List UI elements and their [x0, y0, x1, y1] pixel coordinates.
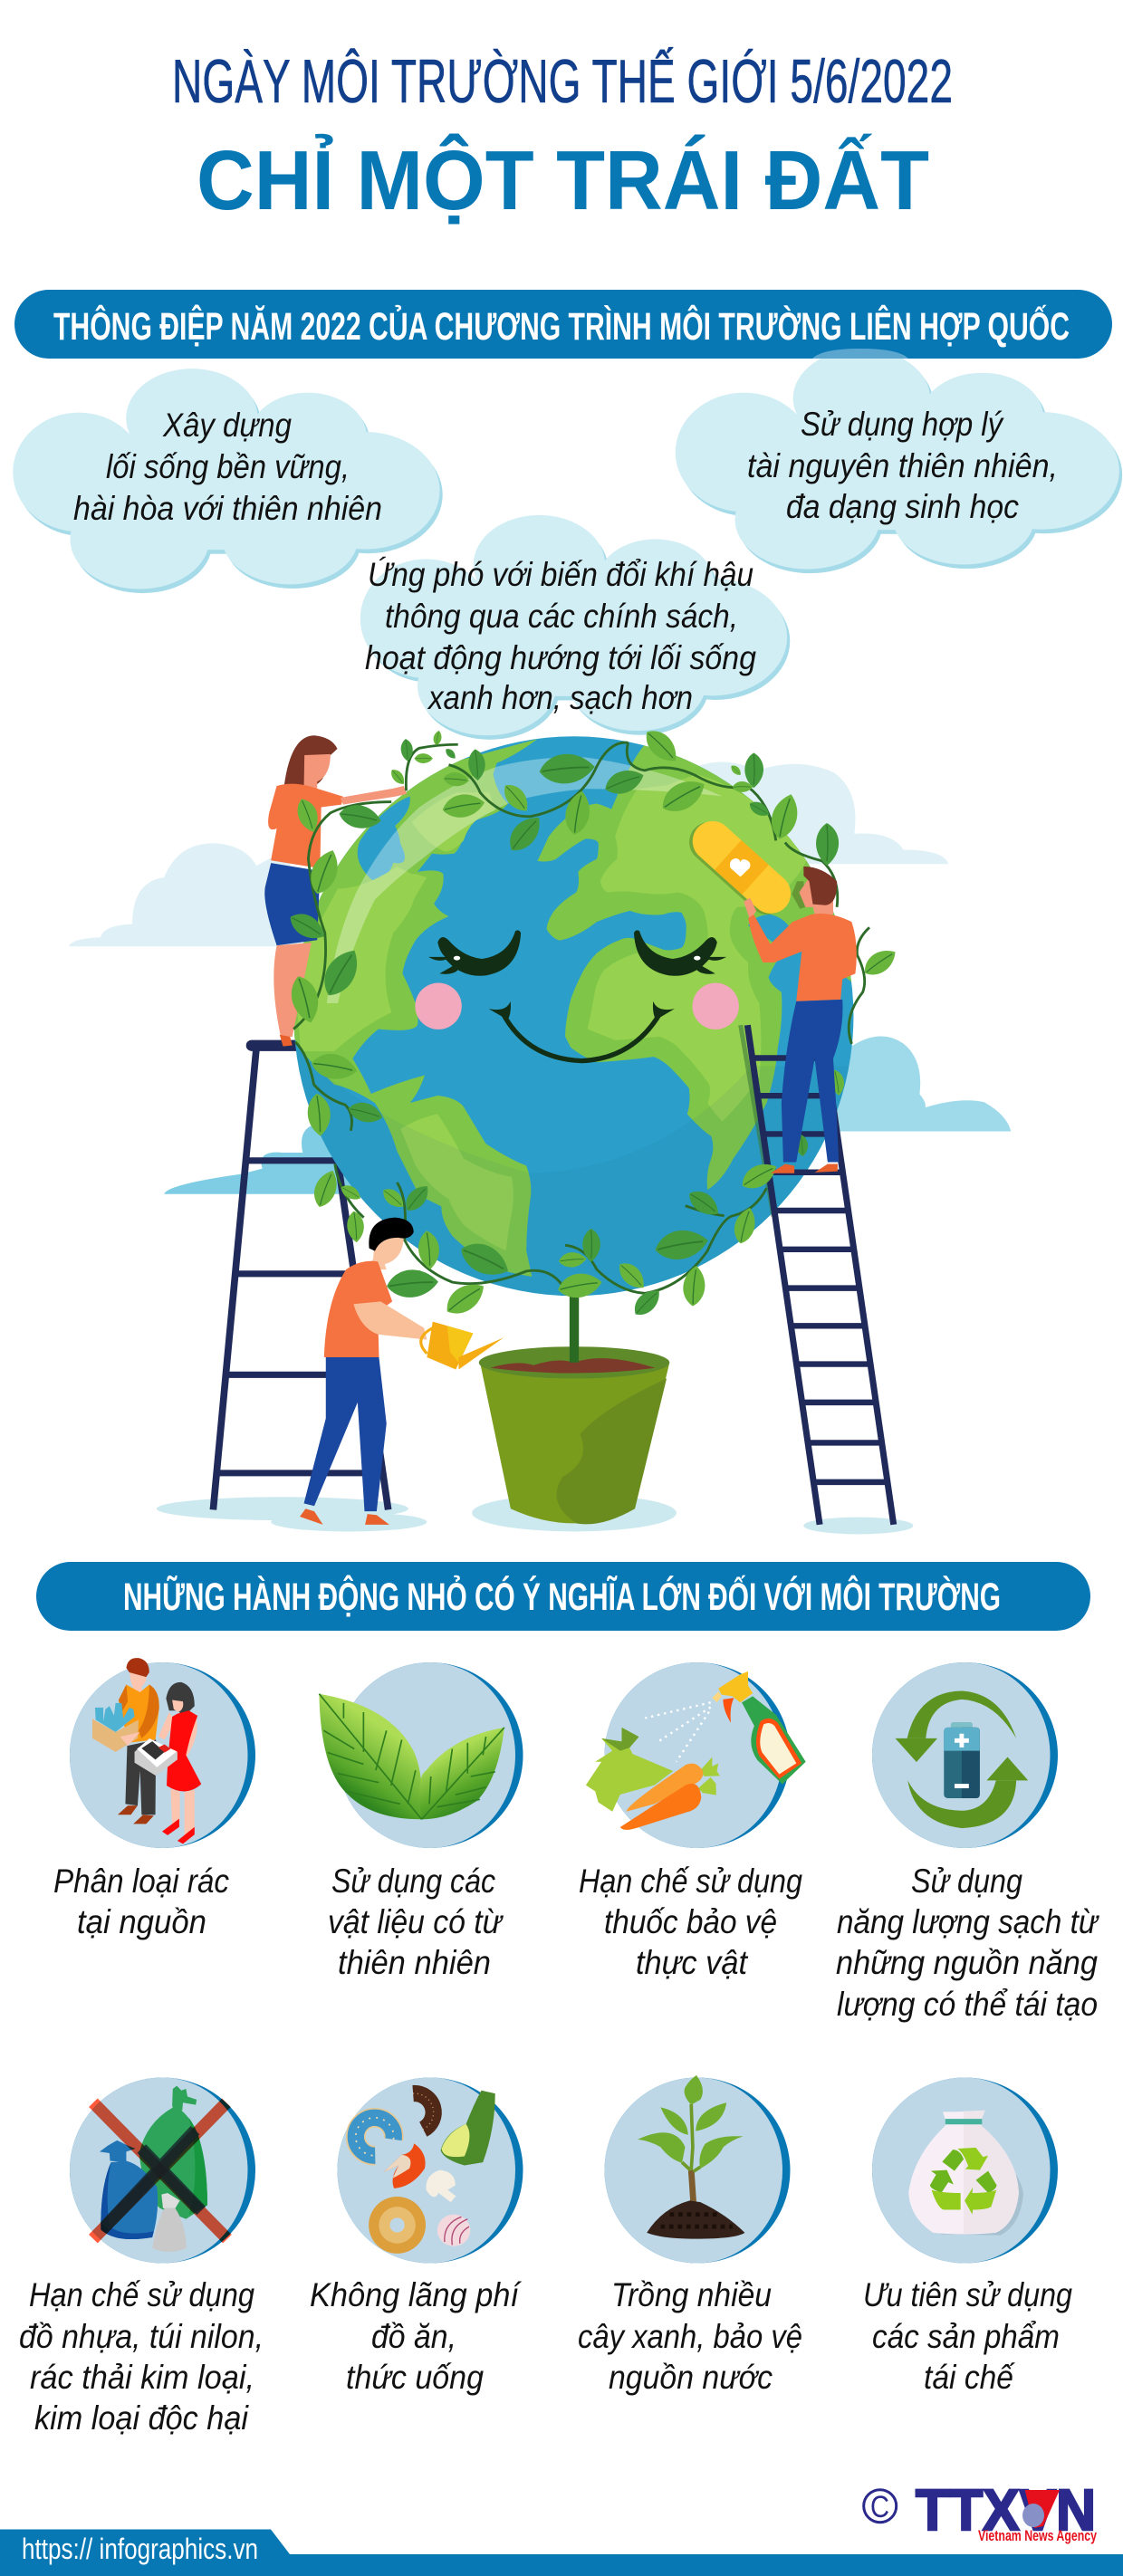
- panel: message clouds: [13, 349, 1122, 740]
- label: natural materials: Sử dụng các: [331, 1863, 495, 1900]
- cloud: centre: [360, 515, 790, 740]
- label: sort waste: tại nguồn: [77, 1903, 206, 1940]
- ground shadows: [157, 1494, 913, 1534]
- label: sort waste: [53, 1863, 229, 1940]
- text: centre cloud message: thông qua các chính sách,: [385, 598, 738, 635]
- title: main heading: CHỈ MỘT TRÁI ĐẤT: [197, 133, 929, 227]
- label: recycled products: [863, 2276, 1072, 2396]
- vines: [293, 742, 869, 1293]
- text: left cloud message: [73, 407, 382, 527]
- label: sort waste: Phân loại rác: [53, 1863, 229, 1900]
- bandage on globe: [681, 811, 799, 924]
- label: avoid food waste: [310, 2276, 522, 2396]
- icon: crossed out plastic bags: [93, 2086, 227, 2252]
- text: right cloud message: tài nguyên thiên nhiên,: [747, 447, 1058, 484]
- icon discs row 1 and 2: [70, 1662, 1058, 2264]
- text: right cloud message: đa dạng sinh học: [786, 488, 1019, 525]
- icons: second pair row 2: [638, 2075, 1023, 2239]
- label: recycled products: tái chế: [924, 2359, 1015, 2396]
- globe: [290, 736, 859, 1303]
- woman on left ladder: [264, 735, 407, 1047]
- label: clean energy: những nguồn năng: [836, 1944, 1098, 1981]
- label: recycled products: các sản phẩm: [872, 2318, 1060, 2355]
- text: centre cloud message: xanh hơn, sạch hơn: [427, 679, 693, 716]
- text: centre cloud message: [365, 556, 756, 716]
- icon: recycled bag: [908, 2111, 1023, 2236]
- label: avoid food waste: đồ ăn,: [371, 2318, 456, 2355]
- label: avoid food waste: thức uống: [346, 2359, 484, 2396]
- footer bar with URL: [0, 2530, 1123, 2576]
- label: limit pesticides: Hạn chế sử dụng: [579, 1863, 802, 1900]
- left ladder: [213, 1040, 389, 1509]
- background clouds: [69, 762, 1011, 1194]
- face: [415, 930, 739, 1061]
- icon: recycling battery: [896, 1691, 1028, 1828]
- right ladder: [741, 1025, 894, 1525]
- label: limit plastics: kim loại độc hại: [34, 2399, 250, 2437]
- text: right cloud message: [747, 406, 1058, 525]
- label: limit plastics: đồ nhựa, túi nilon,: [19, 2318, 264, 2355]
- text: right cloud message: Sử dụng hợp lý: [801, 406, 1004, 443]
- label: clean energy: [836, 1863, 1099, 2023]
- label: natural materials: vật liệu có từ: [328, 1903, 504, 1940]
- label: clean energy: Sử dụng: [911, 1863, 1022, 1900]
- text: left cloud message: lối sống bền vững,: [106, 448, 350, 485]
- logo: TTXVN: TTXVN: [916, 2477, 1096, 2542]
- label: limit pesticides: thực vật: [636, 1944, 749, 1981]
- banner: small actions heading: [36, 1562, 1090, 1631]
- icons: second pair row 1: [586, 1671, 1028, 1830]
- label: plant trees: nguồn nước: [609, 2359, 773, 2396]
- icons: first pair row 2: [93, 2086, 495, 2254]
- icon: seedling: [638, 2075, 744, 2239]
- cloud: right: [676, 349, 1122, 573]
- icons: first pair row 1: [92, 1658, 504, 1843]
- label: plant trees: Trồng nhiều: [611, 2276, 772, 2313]
- label: plant trees: cây xanh, bảo vệ: [578, 2318, 802, 2355]
- logo: TTXVN: C: [870, 2490, 889, 2524]
- label: natural materials: thiên nhiên: [338, 1944, 491, 1981]
- label: limit pesticides: [579, 1863, 802, 1981]
- text: left cloud message: Xây dựng: [162, 407, 292, 444]
- labels row 2: [19, 2276, 1072, 2437]
- label: limit plastics: Hạn chế sử dụng: [29, 2276, 254, 2313]
- label: limit plastics: [19, 2276, 264, 2437]
- icon: leaves: [319, 1694, 504, 1819]
- footer bar with URL: https:// infographics.vn: [22, 2533, 258, 2565]
- man with watering can: [300, 1218, 504, 1525]
- icon: sorting waste people: [92, 1658, 201, 1843]
- label: recycled products: Ưu tiên sử dụng: [863, 2276, 1072, 2313]
- label: limit pesticides: thuốc bảo vệ: [604, 1903, 777, 1940]
- label: limit plastics: rác thải kim loại,: [30, 2359, 254, 2396]
- icon: spray bottle and carrots: [586, 1671, 806, 1830]
- label: natural materials: [328, 1863, 504, 1981]
- man on right ladder: [744, 867, 857, 1173]
- label: avoid food waste: Không lãng phí: [310, 2276, 522, 2313]
- watering plant pot: [479, 1291, 669, 1524]
- label: clean energy: lượng có thể tái tạo: [837, 1986, 1098, 2023]
- text: centre cloud message: hoạt động hướng tới lối sống: [365, 639, 756, 676]
- label: plant trees: [578, 2276, 802, 2396]
- icon: food waste: [356, 2091, 495, 2254]
- label: clean energy: năng lượng sạch từ: [837, 1903, 1099, 1940]
- leaves: [285, 724, 901, 1321]
- text: left cloud message: hài hòa với thiên nhiên: [73, 490, 382, 527]
- labels row 1: [53, 1863, 1099, 2023]
- text: centre cloud message: Ứng phó với biến đổi khí hậu: [368, 556, 753, 593]
- illustration: people caring for the smiling Earth: [69, 724, 1011, 1534]
- cloud: left: [13, 369, 443, 593]
- banner: UN message heading: [14, 290, 1112, 359]
